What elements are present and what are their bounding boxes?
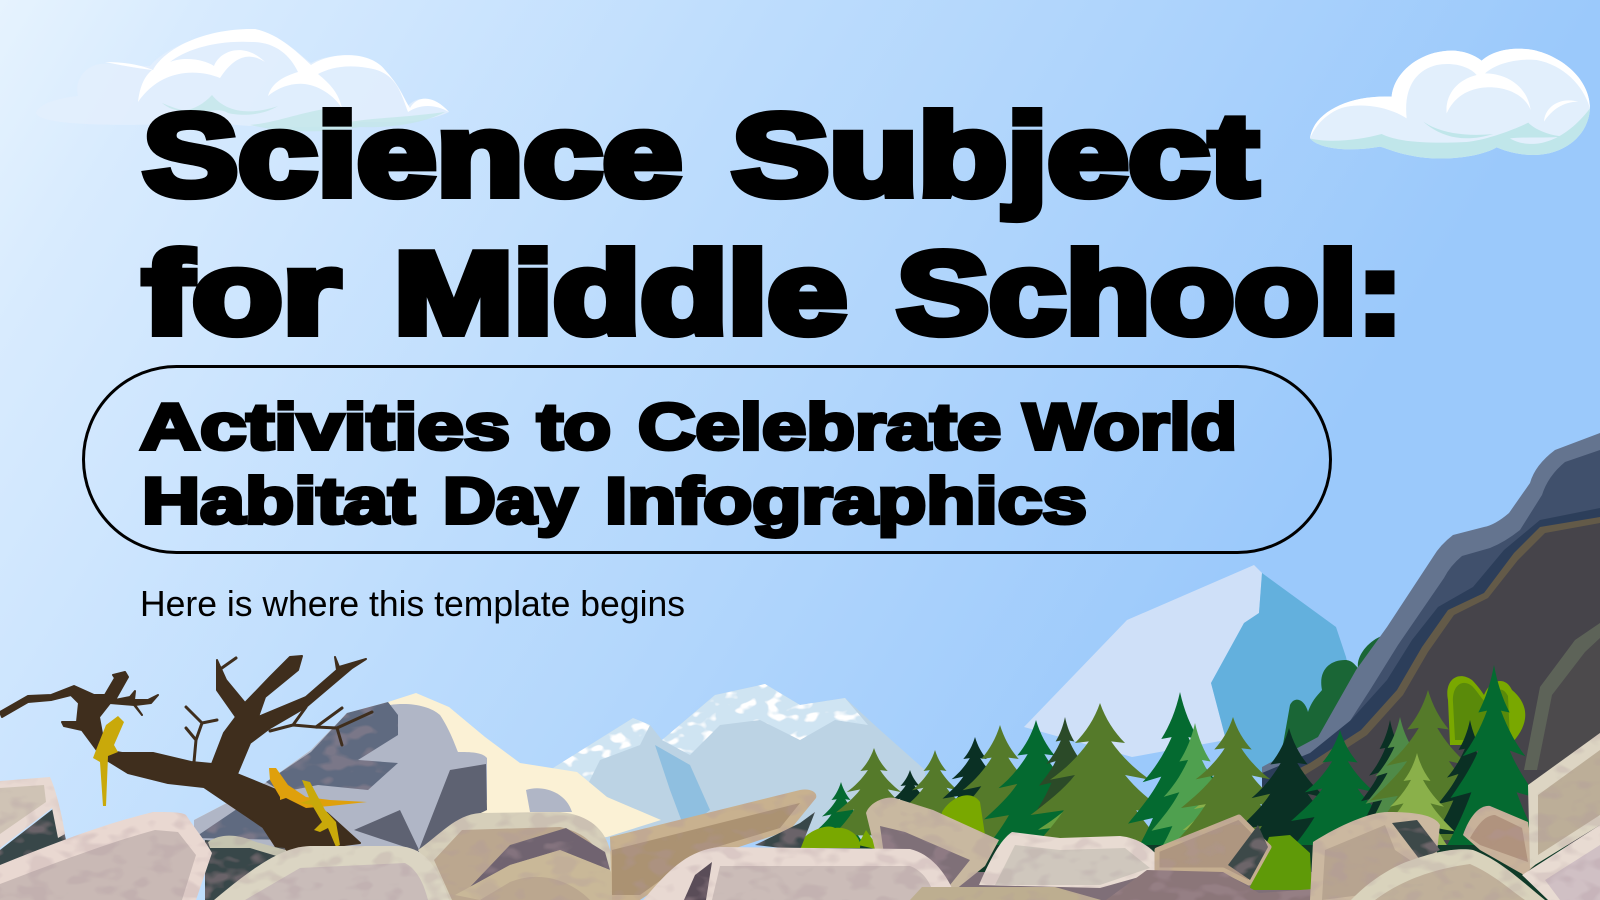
rock: tan middle boulder inner [1322, 825, 1425, 900]
forest: pine trees [812, 665, 1541, 871]
rock: pale front boulder [214, 846, 449, 900]
rocks: left group [0, 777, 816, 900]
pill outline around subheading [84, 366, 1330, 552]
rock: brown boulder [1157, 817, 1269, 883]
rock: tan middle boulder [1310, 812, 1480, 900]
rock: hollow arc [455, 850, 625, 900]
lizard: orange on trunk [269, 768, 367, 808]
rock: large pale boulder inner [995, 845, 1150, 885]
rock: front tan inner [1375, 864, 1525, 900]
bushes: small lime shrubs [798, 795, 1312, 890]
subheading text: World [1023, 390, 1237, 463]
lizard: yellow on trunk [300, 780, 340, 847]
rock: grey boulder shade [880, 826, 970, 885]
rock: large left boulder inner [0, 830, 196, 900]
cloud: top right [1310, 49, 1590, 159]
rock: far left [0, 777, 65, 848]
rock: far right upper [1528, 733, 1600, 868]
rock: pale lower boulder [643, 847, 957, 900]
rock: far right rear [1463, 806, 1535, 875]
rock: far right upper inner [1538, 750, 1600, 855]
mountain: cream and grey rock [194, 693, 661, 853]
rock: far right lower inner [1545, 845, 1600, 900]
title: main heading: for [143, 228, 340, 358]
subheading text: Habitat [142, 464, 415, 537]
rock: grey boulder [866, 798, 999, 890]
rock: brown hollow boulder inner [434, 827, 604, 900]
rock: far right rear inner [1470, 815, 1528, 862]
dark crevice left [0, 805, 66, 900]
rock: hollow [470, 828, 610, 887]
rock: far right lower [1522, 825, 1600, 900]
subheading text: Day [443, 464, 577, 537]
rock: large pale boulder [979, 832, 1162, 888]
rock: far left inner [0, 785, 46, 834]
rock: purple boulder [1106, 870, 1348, 900]
title: main heading: School: [897, 228, 1403, 358]
mountain: large blue peak [1024, 565, 1351, 775]
forest floor backing behind rocks [790, 845, 1600, 900]
subheading text: to [537, 390, 611, 463]
subheading text [140, 390, 1237, 537]
cliff: right rock wall [1262, 433, 1600, 850]
rock: dark slit [684, 862, 712, 900]
rock: crevice ridge [208, 836, 290, 860]
rock: pale front boulder inner [245, 863, 428, 900]
title: main heading: Subject [732, 90, 1258, 220]
tree: bare dead tree [0, 656, 372, 853]
subheading text: Activities [140, 390, 510, 463]
title: main heading [143, 90, 1403, 358]
mountains: pale blue range [553, 684, 925, 840]
rock: cave hollow [1392, 820, 1440, 860]
lizard: on left branch [93, 716, 124, 806]
bushes behind cliff [1282, 636, 1390, 770]
subheading text: Celebrate [638, 390, 1001, 463]
rocks: right group [643, 733, 1600, 900]
title: main heading: Science [143, 90, 682, 220]
rock: slab band [610, 789, 816, 900]
rock: pale lower boulder inner [712, 866, 935, 900]
title: main heading: Middle [394, 228, 847, 358]
rock: dark crevice [205, 840, 290, 900]
rock: tan bottom slab [910, 887, 1101, 900]
rock: brown hollow boulder [418, 812, 617, 900]
rock: slab inner [612, 803, 800, 895]
dark gap under slab [755, 812, 815, 850]
rock: large left boulder [0, 812, 212, 900]
rock: dark gap [1228, 825, 1268, 880]
subtitle text: Here is where this template begins [140, 583, 685, 624]
rock: front tan [1351, 849, 1545, 900]
subheading text: Infographics [605, 464, 1087, 537]
cloud: top left [36, 29, 449, 131]
